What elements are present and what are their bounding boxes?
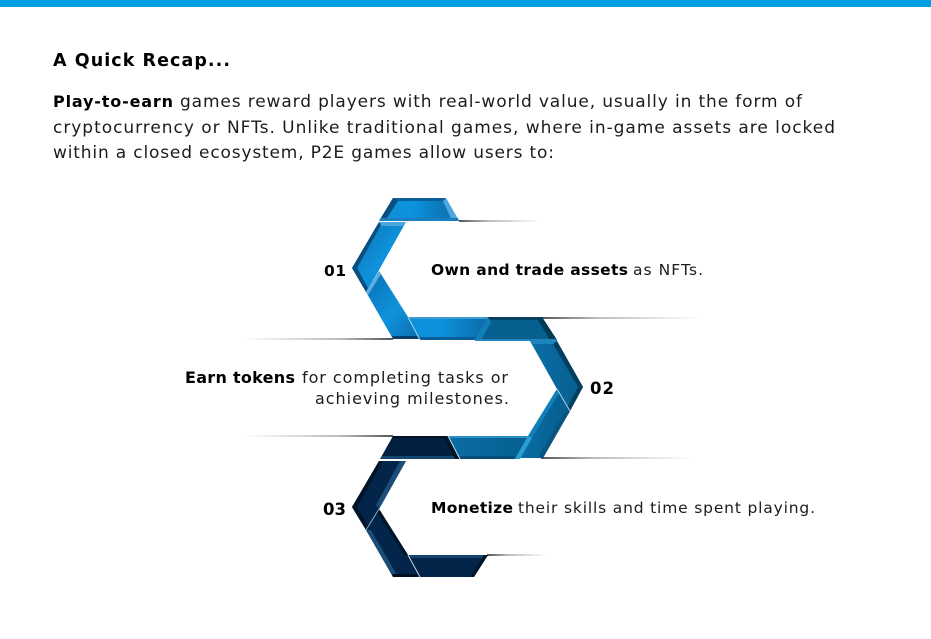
hexagon segment 03: navy (352, 436, 488, 577)
number 03: 03 (323, 500, 346, 519)
top bar (0, 0, 931, 7)
shadow lines (243, 220, 700, 556)
number 02: 02 (590, 379, 614, 398)
text: earn tokens: achieving milestones. (315, 389, 509, 408)
intro paragraph: games reward players with real-world value, usually in the form of (180, 92, 803, 112)
intro paragraph: Play-to-earn (53, 92, 173, 111)
text: monetize: Monetize (431, 499, 513, 517)
text: own and trade assets: as NFTs. (633, 261, 703, 279)
text: earn tokens: for completing tasks or (302, 368, 508, 387)
hexagon segment 02: mid blue (448, 317, 583, 459)
intro paragraph (53, 92, 835, 163)
number 01: 01 (324, 262, 346, 280)
intro paragraph: within a closed ecosystem, P2E games allow users to: (53, 143, 554, 163)
intro paragraph: cryptocurrency or NFTs. Unlike traditional games, where in-game assets are locked (53, 118, 835, 138)
text: earn tokens: Earn tokens (185, 368, 295, 387)
text: own and trade assets: Own and trade assets (431, 261, 628, 279)
hexagon segment 01: bright blue (352, 198, 488, 340)
title: A Quick Recap... (53, 51, 230, 71)
text: earn tokens (185, 368, 509, 408)
text: monetize: their skills and time spent playing. (518, 499, 815, 517)
